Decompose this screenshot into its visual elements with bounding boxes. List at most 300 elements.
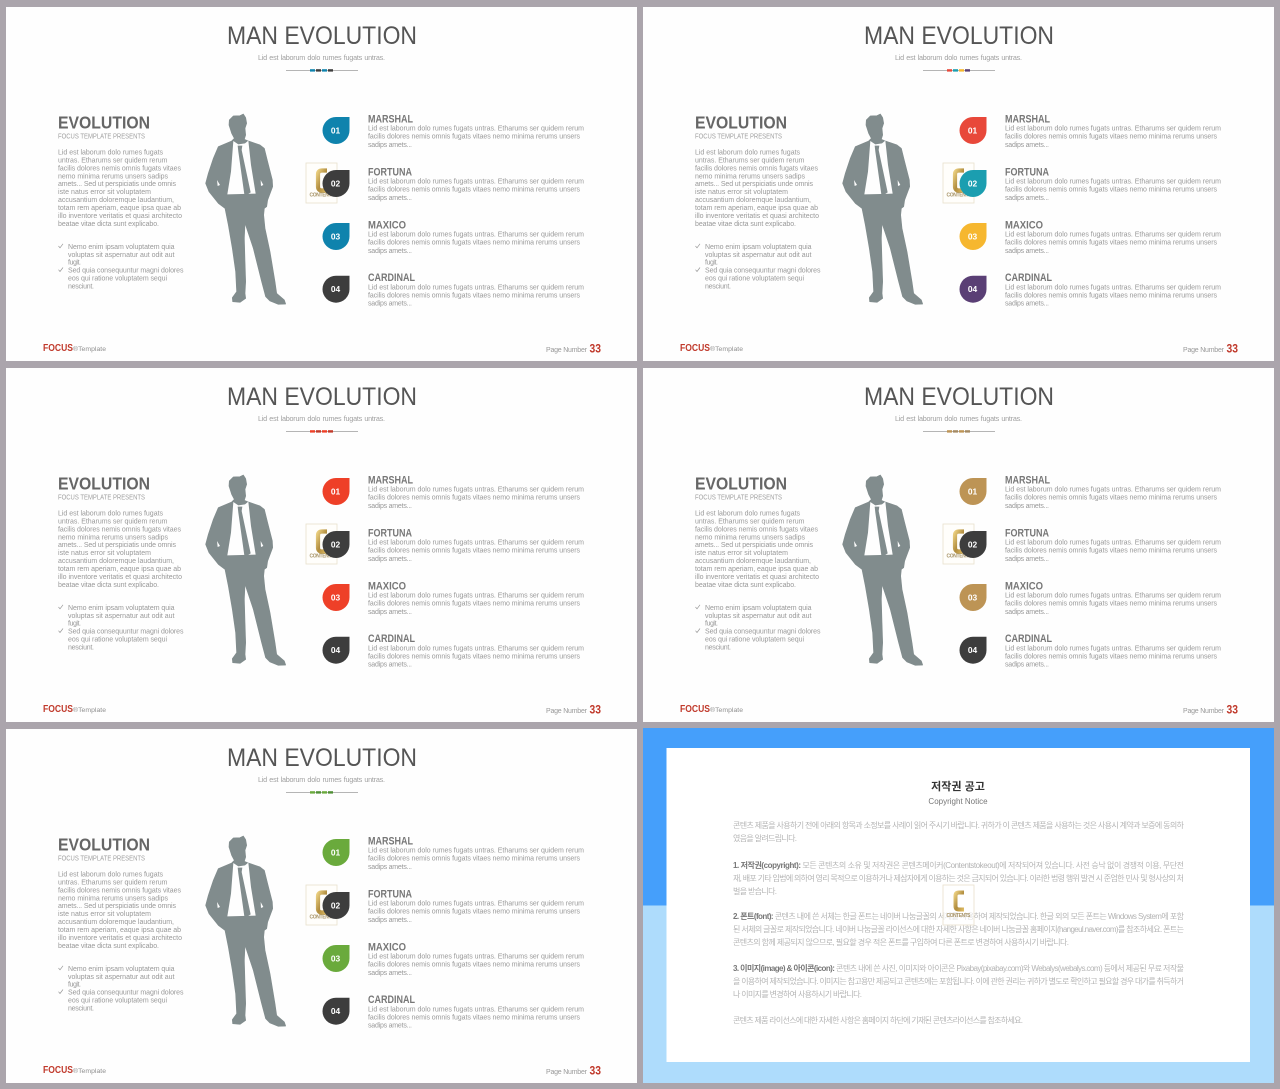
panel: slide 4 tan [643, 368, 1274, 722]
body paragraph: Lid est laborum dolo rumes fugats [58, 150, 164, 156]
item 01: 01 [968, 126, 977, 136]
watermark logo [306, 163, 337, 203]
checklist: fugit. [705, 260, 718, 267]
page number: Page Number [546, 347, 588, 354]
item 04 [322, 272, 584, 308]
body paragraph [58, 872, 182, 950]
item 04: 04 [331, 284, 340, 294]
body paragraph: facilis dolores nemis omnis fugats vitaes [695, 526, 818, 533]
item 02 [322, 888, 584, 924]
checklist: Nemo enim ipsam voluptatem quia [68, 244, 175, 251]
subtitle: Lid est laborum dolo rumes fugats untras. [258, 775, 385, 784]
item 04: sadips amets... [1005, 662, 1049, 669]
subtitle: Lid est laborum dolo rumes fugats untras. [895, 414, 1022, 423]
body paragraph [695, 510, 819, 589]
watermark logo: CONTENTS [310, 192, 335, 198]
checklist: fugit. [68, 621, 81, 628]
item 04: sadips amets... [1005, 301, 1049, 308]
item 01 [960, 113, 1221, 149]
man silhouette [206, 836, 286, 1026]
item 03: facilis dolores nemis omnis fugats vitaes nemo minima rerums unsers [368, 240, 580, 247]
item 03: MAXICO [368, 941, 406, 953]
heading: evolution: EVOLUTION [58, 834, 150, 854]
footer brand: ®Template [73, 345, 106, 353]
section 1: copyright [733, 860, 1184, 896]
man silhouette [206, 475, 286, 665]
item 03: 03 [331, 954, 340, 964]
body paragraph: nemo minima rerums unsers sadips [58, 895, 168, 902]
heading: evolution: EVOLUTION [58, 112, 150, 132]
item 03 [960, 580, 1221, 616]
subtitle: Lid est laborum dolo rumes fugats untras. [258, 414, 385, 423]
title divider [923, 69, 995, 72]
title: MAN EVOLUTION [864, 383, 1054, 411]
section 1: copyright: 1. 저작권(copyright): 모든 콘텐츠의 소유 및 저작권은 콘텐츠메이커(Contentstokeout)에 저작되어져 있습니다. 사전 승낙 없이 경쟁적 이용, 무단전 [733, 860, 1184, 870]
checklist [58, 966, 184, 1013]
section 1: copyright: 재, 배포 기타 임법에 의하여 영리 목적으로 이용하거나 제삼자에게 이용하는 것은 금지되어 있습니다. 이러한 법령 행위 발견 시 준엄한 민사 및 형사상의 처 [733, 873, 1184, 883]
item 01: Lid est laborum dolo rumes fugats untras. Etharums ser quidem rerum [368, 126, 584, 133]
item 02: Lid est laborum dolo rumes fugats untras. Etharums ser quidem rerum [1005, 179, 1221, 186]
body paragraph: untras. Etharums ser quidem rerum [695, 157, 805, 164]
checklist: eos qui ratione voluptatem sequi [705, 637, 804, 644]
panel: slide 2 multicolor [643, 7, 1274, 361]
item 03: Lid est laborum dolo rumes fugats untras. Etharums ser quidem rerum [368, 593, 584, 600]
heading: evolution: EVOLUTION [695, 112, 787, 132]
item 01: facilis dolores nemis omnis fugats vitaes nemo minima rerums unsers [368, 495, 580, 502]
body paragraph: facilis dolores nemis omnis fugats vitaes [58, 165, 182, 172]
item 03: facilis dolores nemis omnis fugats vitaes nemo minima rerums unsers [1005, 240, 1218, 247]
intro paragraph [733, 820, 1185, 843]
title: MAN EVOLUTION [864, 22, 1054, 50]
item 03: sadips amets... [1005, 248, 1049, 255]
watermark logo: CONTENTS [310, 554, 335, 560]
title: MAN EVOLUTION [227, 744, 417, 772]
body paragraph: totam rem aperiam, eaque ipsa quae ab [695, 566, 818, 573]
item 02 [960, 166, 1221, 202]
checklist: voluptas sit aspernatur aut odit aut [68, 252, 175, 259]
body paragraph [695, 150, 819, 228]
watermark logo: CONTENTS [946, 554, 972, 560]
body paragraph: Lid est laborum dolo rumes fugats [58, 510, 164, 518]
item 04 [960, 633, 1221, 669]
item 03: sadips amets... [368, 609, 412, 616]
item 01 [322, 474, 584, 510]
body paragraph: facilis dolores nemis omnis fugats vitaes [58, 887, 182, 894]
body paragraph: illo inventore veritatis et quasi architecto [58, 213, 182, 220]
checklist: fugit. [68, 982, 81, 989]
item 02: Lid est laborum dolo rumes fugats untras. Etharums ser quidem rerum [1005, 540, 1221, 547]
checklist [696, 244, 821, 291]
item 01: Lid est laborum dolo rumes fugats untras. Etharums ser quidem rerum [368, 848, 584, 855]
item 01: Lid est laborum dolo rumes fugats untras. Etharums ser quidem rerum [1005, 126, 1221, 133]
page number: Page Number [1183, 708, 1225, 715]
item 04: CARDINAL [368, 272, 415, 284]
body paragraph: nemo minima rerums unsers sadips [695, 534, 806, 541]
body paragraph: totam rem aperiam, eaque ipsa quae ab [58, 566, 181, 573]
notice title: 저작권 공고 [931, 779, 985, 793]
item 02 [322, 166, 584, 202]
body paragraph: iste natus error sit voluptatem [695, 189, 788, 196]
title: MAN EVOLUTION [227, 383, 417, 411]
item 04: facilis dolores nemis omnis fugats vitaes nemo minima rerums unsers [1005, 292, 1218, 299]
item 03: Lid est laborum dolo rumes fugats untras. Etharums ser quidem rerum [1005, 232, 1221, 239]
item 02: 02 [331, 900, 340, 910]
page number: 33 [590, 704, 601, 716]
footer brand: ®Template [73, 1067, 106, 1075]
item 01: 01 [331, 848, 340, 858]
watermark logo [943, 885, 974, 925]
item 04: CARDINAL [1005, 633, 1052, 645]
item 03: facilis dolores nemis omnis fugats vitaes nemo minima rerums unsers [368, 962, 580, 969]
item 02: FORTUNA [1005, 166, 1049, 178]
item 04: CARDINAL [368, 994, 415, 1006]
body paragraph: nemo minima rerums unsers sadips [58, 173, 168, 180]
watermark logo [306, 524, 337, 564]
footer brand [43, 343, 106, 354]
checklist: fugit. [705, 621, 718, 628]
intro paragraph: 였음을 알려드립니다. [733, 833, 797, 843]
body paragraph: accusantium doloremque laudantium, [695, 197, 811, 204]
footer brand: ®Template [710, 345, 743, 353]
item 02: sadips amets... [368, 556, 412, 563]
item 01: facilis dolores nemis omnis fugats vitaes nemo minima rerums unsers [1005, 495, 1218, 502]
item 03: sadips amets... [1005, 609, 1049, 616]
item 04: Lid est laborum dolo rumes fugats untras. Etharums ser quidem rerum [368, 284, 584, 291]
item 02: FORTUNA [368, 166, 412, 178]
item 02: Lid est laborum dolo rumes fugats untras. Etharums ser quidem rerum [368, 540, 584, 547]
footer brand: FOCUS [43, 1065, 73, 1076]
body paragraph [58, 150, 182, 228]
item 02: FORTUNA [368, 888, 412, 900]
checklist [696, 605, 821, 652]
footer brand [680, 704, 743, 715]
item 02: facilis dolores nemis omnis fugats vitaes nemo minima rerums unsers [368, 187, 580, 194]
body paragraph: Lid est laborum dolo rumes fugats [695, 150, 800, 156]
body paragraph: amets... Sed ut perspiciatis unde omnis [695, 542, 814, 549]
section 3: image and icon: 3. 이미지(image) & 아이콘(icon): 콘텐츠 내에 쓴 사진, 이미지와 아이콘은 Pixabay(pixabay.com)와 Webalys(webalys.com) 등에서 제공된 무료 저작물 [733, 963, 1184, 973]
item 04: Lid est laborum dolo rumes fugats untras. Etharums ser quidem rerum [368, 1006, 584, 1013]
checklist: voluptas sit aspernatur aut odit aut [705, 613, 812, 620]
page number [546, 344, 601, 356]
footer brand [680, 343, 743, 354]
man silhouette [843, 475, 923, 665]
page number [1183, 704, 1238, 716]
title divider [286, 791, 358, 794]
item 02: facilis dolores nemis omnis fugats vitaes nemo minima rerums unsers [368, 548, 580, 555]
body paragraph: iste natus error sit voluptatem [58, 550, 151, 557]
item 04: facilis dolores nemis omnis fugats vitaes nemo minima rerums unsers [368, 653, 580, 660]
item 04: sadips amets... [368, 1023, 412, 1030]
item 01: MARSHAL [368, 113, 413, 125]
section 3: image and icon: 을 이용하여 제작되었습니다. 이미지는 참고용만 제공되고 콘텐츠에는 포함됩니다. 이에 관한 권리는 귀하가 별도로 확인하고 필요할 경우 대가를 취득하거 [733, 976, 1184, 986]
footer brand: ®Template [710, 706, 743, 714]
item 01: facilis dolores nemis omnis fugats vitaes nemo minima rerums unsers [368, 856, 580, 863]
watermark logo: CONTENTS [946, 192, 972, 198]
page number: 33 [590, 1066, 601, 1078]
section 2: font: 2. 폰트(font): 콘텐츠 내에 쓴 서체는 한글 폰트는 네이버 나눔글꼴의 서체를 사용하여 제작되었습니다. 한글 외의 모든 폰트는 Windows System에 포함 [733, 911, 1185, 921]
body paragraph: untras. Etharums ser quidem rerum [58, 879, 168, 886]
checklist: Sed quia consequuntur magni dolores [705, 629, 821, 636]
body paragraph: accusantium doloremque laudantium, [695, 558, 811, 565]
item 03: MAXICO [368, 219, 406, 231]
heading: evolution: EVOLUTION [58, 474, 150, 494]
item 02: FORTUNA [1005, 527, 1049, 539]
checklist: Sed quia consequuntur magni dolores [68, 990, 184, 997]
body paragraph: amets... Sed ut perspiciatis unde omnis [58, 903, 176, 910]
watermark logo: CONTENTS [310, 914, 335, 920]
body paragraph: Lid est laborum dolo rumes fugats [695, 510, 800, 518]
item 02: 02 [968, 178, 977, 188]
title divider [923, 430, 995, 433]
item 03 [322, 941, 584, 977]
heading: evolution: EVOLUTION [695, 474, 787, 494]
item 04: 04 [968, 645, 977, 655]
item 04: CARDINAL [368, 633, 415, 645]
page number: 33 [590, 344, 601, 356]
item 02: 02 [331, 540, 340, 550]
notice subtitle: Copyright Notice [928, 797, 988, 806]
checklist: voluptas sit aspernatur aut odit aut [68, 613, 175, 620]
checklist: eos qui ratione voluptatem sequi [68, 998, 167, 1005]
checklist: nesciunt. [68, 284, 94, 291]
footer brand [43, 704, 106, 715]
item 03: MAXICO [1005, 580, 1043, 592]
item 03: sadips amets... [368, 248, 412, 255]
body paragraph: nemo minima rerums unsers sadips [695, 173, 806, 180]
item 03 [322, 580, 584, 616]
title: MAN EVOLUTION [227, 22, 417, 50]
item 04: 04 [968, 284, 977, 294]
watermark logo [943, 524, 974, 564]
footer brand [43, 1065, 106, 1076]
body paragraph: accusantium doloremque laudantium, [58, 197, 174, 204]
body paragraph: illo inventore veritatis et quasi architecto [695, 213, 819, 220]
checklist: Sed quia consequuntur magni dolores [68, 629, 184, 636]
subtitle: Lid est laborum dolo rumes fugats untras. [258, 53, 385, 62]
checklist: fugit. [68, 260, 81, 267]
item 02: facilis dolores nemis omnis fugats vitaes nemo minima rerums unsers [368, 909, 580, 916]
item 01: MARSHAL [368, 474, 413, 486]
item 04: 04 [331, 1006, 340, 1016]
section 2: font: 콘텐츠의 함께 제공되지 않으므로, 필요할 경우 적은 폰트를 구입하여 다른 폰트로 변경하여 사용하시기 바랍니다. [733, 937, 1069, 947]
subheading: FOCUS TEMPLATE PRESENTS [58, 134, 145, 140]
page number: 33 [1226, 344, 1238, 356]
body paragraph: totam rem aperiam, eaque ipsa quae ab [58, 927, 181, 934]
item 01: MARSHAL [368, 835, 413, 847]
checklist: Nemo enim ipsam voluptatem quia [705, 244, 812, 251]
footer brand: FOCUS [680, 343, 710, 354]
item 02 [960, 527, 1221, 563]
checklist: Nemo enim ipsam voluptatem quia [68, 966, 175, 973]
item 03: facilis dolores nemis omnis fugats vitaes nemo minima rerums unsers [368, 601, 580, 608]
item 03: Lid est laborum dolo rumes fugats untras. Etharums ser quidem rerum [368, 954, 584, 961]
page number: Page Number [546, 1069, 588, 1076]
item 04: facilis dolores nemis omnis fugats vitaes nemo minima rerums unsers [1005, 653, 1218, 660]
item 01 [322, 113, 584, 149]
item 02 [322, 527, 584, 563]
checklist [58, 605, 184, 652]
item 04 [322, 633, 584, 669]
item 04: Lid est laborum dolo rumes fugats untras. Etharums ser quidem rerum [368, 645, 584, 652]
body paragraph: illo inventore veritatis et quasi architecto [58, 935, 182, 942]
title divider [286, 430, 358, 433]
subheading: FOCUS TEMPLATE PRESENTS [695, 494, 782, 502]
item 02: Lid est laborum dolo rumes fugats untras. Etharums ser quidem rerum [368, 901, 584, 908]
item 03: Lid est laborum dolo rumes fugats untras. Etharums ser quidem rerum [368, 232, 584, 239]
section 3: image and icon: 나 이미지를 변경하여 사용하시기 바랍니다. [733, 989, 862, 999]
item 03: 03 [331, 232, 340, 242]
body paragraph: accusantium doloremque laudantium, [58, 558, 174, 565]
checklist: eos qui ratione voluptatem sequi [705, 276, 804, 283]
item 03 [322, 219, 584, 255]
footer brand: ®Template [73, 706, 106, 714]
page number [546, 1066, 601, 1078]
item 04: facilis dolores nemis omnis fugats vitaes nemo minima rerums unsers [368, 1014, 580, 1021]
item 02: 02 [968, 540, 977, 550]
item 04: CARDINAL [1005, 272, 1052, 284]
footer brand: FOCUS [43, 343, 73, 354]
item 02: Lid est laborum dolo rumes fugats untras. Etharums ser quidem rerum [368, 179, 584, 186]
man silhouette [206, 114, 286, 304]
section 2: font [733, 911, 1185, 947]
body paragraph: facilis dolores nemis omnis fugats vitaes [695, 165, 818, 172]
panel: copyright notice [643, 728, 1274, 1083]
body paragraph: illo inventore veritatis et quasi architecto [695, 574, 819, 581]
body paragraph [58, 510, 182, 589]
checklist: nesciunt. [68, 1006, 94, 1013]
page number [1183, 344, 1238, 356]
body paragraph: amets... Sed ut perspiciatis unde omnis [695, 181, 814, 188]
item 04: sadips amets... [368, 301, 412, 308]
item 01: sadips amets... [368, 142, 412, 149]
item 03: Lid est laborum dolo rumes fugats untras. Etharums ser quidem rerum [1005, 593, 1221, 600]
body paragraph: illo inventore veritatis et quasi architecto [58, 574, 182, 581]
item 04: sadips amets... [368, 662, 412, 669]
page number: 33 [1226, 704, 1238, 716]
item 03: MAXICO [368, 580, 406, 592]
body paragraph: facilis dolores nemis omnis fugats vitaes [58, 526, 182, 533]
item 01 [960, 474, 1221, 510]
body paragraph: Lid est laborum dolo rumes fugats [58, 872, 164, 878]
checklist: Nemo enim ipsam voluptatem quia [705, 605, 812, 612]
item 02: sadips amets... [368, 195, 412, 202]
item 01: facilis dolores nemis omnis fugats vitaes nemo minima rerums unsers [368, 134, 580, 141]
item 03: sadips amets... [368, 970, 412, 977]
item 01: 01 [968, 486, 977, 496]
panel: slide 3 red [6, 368, 637, 722]
item 01 [322, 835, 584, 871]
body paragraph: beatae vitae dicta sunt explicabo. [58, 582, 159, 589]
section 2: font: 된 서체의 글꼴로 제작되었습니다. 네이버 나눔글꼴 라이선스에 대한 자세한 사항은 네이버 나눔글꼴 홈페이지(hangeul.naver.com)를 참조하세요. 폰트는 [733, 924, 1184, 934]
title divider [286, 69, 358, 72]
body paragraph: beatae vitae dicta sunt explicabo. [58, 221, 159, 228]
item 01: sadips amets... [368, 864, 412, 871]
item 02: sadips amets... [1005, 195, 1049, 202]
watermark logo [943, 163, 974, 203]
item 02: sadips amets... [1005, 556, 1049, 563]
checklist: nesciunt. [705, 284, 731, 291]
footer brand: FOCUS [43, 704, 73, 715]
item 01: MARSHAL [1005, 113, 1050, 125]
item 02: facilis dolores nemis omnis fugats vitaes nemo minima rerums unsers [1005, 187, 1218, 194]
checklist: Sed quia consequuntur magni dolores [705, 268, 821, 275]
body paragraph: untras. Etharums ser quidem rerum [58, 518, 168, 525]
item 01: sadips amets... [1005, 503, 1049, 510]
body paragraph: iste natus error sit voluptatem [58, 911, 151, 918]
item 01: sadips amets... [368, 503, 412, 510]
page number [546, 704, 601, 716]
body paragraph: untras. Etharums ser quidem rerum [58, 157, 168, 164]
checklist [58, 244, 184, 291]
body paragraph: totam rem aperiam, eaque ipsa quae ab [695, 205, 818, 212]
man silhouette [843, 114, 923, 304]
checklist: voluptas sit aspernatur aut odit aut [68, 974, 175, 981]
watermark logo: CONTENTS [946, 913, 971, 919]
checklist: nesciunt. [705, 645, 731, 652]
checklist: voluptas sit aspernatur aut odit aut [705, 252, 812, 259]
item 03: MAXICO [1005, 219, 1043, 231]
item 04: Lid est laborum dolo rumes fugats untras. Etharums ser quidem rerum [1005, 284, 1221, 291]
body paragraph: nemo minima rerums unsers sadips [58, 534, 168, 541]
item 02: FORTUNA [368, 527, 412, 539]
body paragraph: iste natus error sit voluptatem [695, 550, 788, 557]
item 01: 01 [331, 126, 340, 136]
page number: Page Number [546, 708, 588, 715]
item 01: 01 [331, 486, 340, 496]
checklist: eos qui ratione voluptatem sequi [68, 276, 167, 283]
item 04: 04 [331, 645, 340, 655]
checklist: nesciunt. [68, 645, 94, 652]
item 03: facilis dolores nemis omnis fugats vitaes nemo minima rerums unsers [1005, 601, 1218, 608]
body paragraph: beatae vitae dicta sunt explicabo. [58, 943, 159, 950]
subheading: FOCUS TEMPLATE PRESENTS [58, 494, 145, 502]
body paragraph: beatae vitae dicta sunt explicabo. [695, 582, 796, 589]
item 04: facilis dolores nemis omnis fugats vitaes nemo minima rerums unsers [368, 292, 580, 299]
item 04 [960, 272, 1221, 308]
checklist: Nemo enim ipsam voluptatem quia [68, 605, 175, 612]
item 02: 02 [331, 178, 340, 188]
item 03 [960, 219, 1221, 255]
item 02: sadips amets... [368, 917, 412, 924]
subheading: FOCUS TEMPLATE PRESENTS [58, 856, 145, 862]
subtitle: Lid est laborum dolo rumes fugats untras. [895, 53, 1022, 62]
watermark logo [306, 885, 337, 925]
item 01: sadips amets... [1005, 142, 1049, 149]
intro paragraph: 콘텐츠 제품을 사용하기 전에 아래의 항목과 소정보를 사례이 읽어 주시기 바랍니다. 귀하가 이 콘텐츠 제품을 사용하는 것은 사용시 계약과 보증에 동의하 [733, 820, 1185, 830]
body paragraph: amets... Sed ut perspiciatis unde omnis [58, 542, 176, 549]
item 03: 03 [968, 232, 977, 242]
page number: Page Number [1183, 347, 1225, 354]
item 04 [322, 994, 584, 1030]
item 01: Lid est laborum dolo rumes fugats untras. Etharums ser quidem rerum [1005, 487, 1221, 494]
body paragraph: totam rem aperiam, eaque ipsa quae ab [58, 205, 181, 212]
body paragraph: untras. Etharums ser quidem rerum [695, 518, 805, 525]
checklist: Sed quia consequuntur magni dolores [68, 268, 184, 275]
section 1: copyright: 벌을 받습니다. [733, 886, 777, 896]
item 03: 03 [968, 592, 977, 602]
item 02: facilis dolores nemis omnis fugats vitaes nemo minima rerums unsers [1005, 548, 1218, 555]
item 01: facilis dolores nemis omnis fugats vitaes nemo minima rerums unsers [1005, 134, 1218, 141]
checklist: eos qui ratione voluptatem sequi [68, 637, 167, 644]
panel: slide 1 teal [6, 7, 637, 361]
closing note: 콘텐츠 제품 라이선스에 대한 자세한 사항은 홈페이지 하단에 기재된 콘텐츠라이선스를 참조하세요. [733, 1015, 1023, 1025]
item 01: MARSHAL [1005, 474, 1050, 486]
item 04: Lid est laborum dolo rumes fugats untras. Etharums ser quidem rerum [1005, 645, 1221, 652]
body paragraph: accusantium doloremque laudantium, [58, 919, 174, 926]
panel: slide 5 green [6, 729, 637, 1083]
item 01: Lid est laborum dolo rumes fugats untras. Etharums ser quidem rerum [368, 487, 584, 494]
body paragraph: iste natus error sit voluptatem [58, 189, 151, 196]
